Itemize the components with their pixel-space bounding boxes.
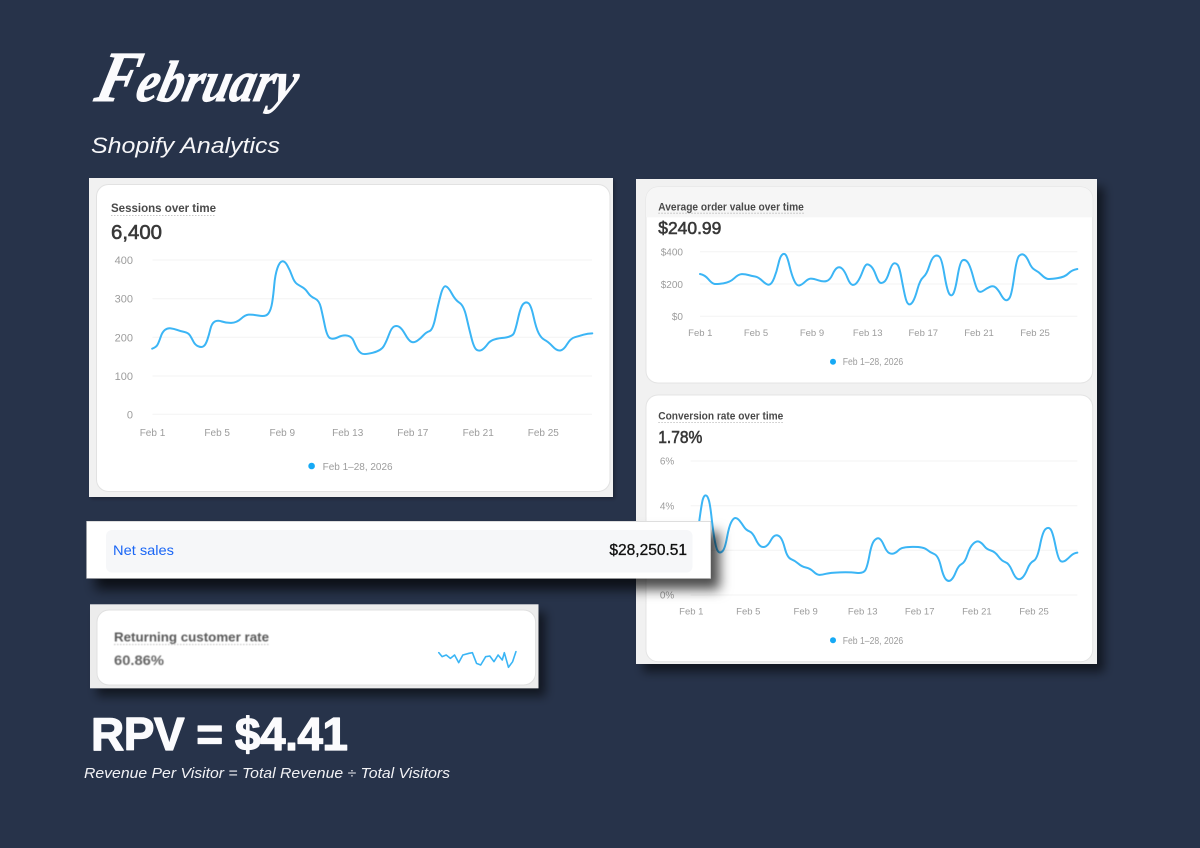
card: conversion rate [646, 395, 1093, 662]
panel: sessions over time [89, 178, 613, 497]
subtitle: Shopify Analytics [91, 133, 280, 158]
chart: sessions line: 100 [115, 371, 133, 383]
chart: returning customer sparkline [439, 652, 516, 667]
chart: average order value line: Feb 9 [800, 328, 824, 339]
chart: conversion rate line [660, 457, 1077, 618]
value: returning customer rate: 60.86% [114, 653, 164, 668]
chart: sessions line: Feb 17 [397, 428, 429, 439]
chart: average order value line: Feb 5 [744, 328, 768, 339]
chart: average order value line: Feb 13 [853, 328, 882, 339]
chart: average order value line: $0 [672, 312, 683, 323]
chart: sessions line: 300 [115, 294, 133, 306]
chart: sessions line: 200 [115, 332, 133, 344]
chart: conversion rate line: Feb 5 [736, 606, 760, 618]
panel: AOV and conversion charts [636, 179, 1097, 664]
heading: returning customer rate: Returning customer rate [114, 630, 269, 644]
chart: sessions line: 0 [127, 409, 133, 421]
chart: average order value line: Feb 17 [909, 328, 938, 339]
legend: conversion rate: Feb 1–28, 2026 [843, 636, 904, 647]
chart: average order value line: $200 [661, 280, 683, 291]
chart: conversion rate line: Feb 17 [905, 606, 934, 618]
heading: average order value: Average order value over time [658, 202, 804, 214]
value: net sales: $28,250.51 [609, 542, 687, 559]
chart: sessions line: Feb 9 [270, 428, 296, 439]
legend: average order value: Feb 1–28, 2026 [843, 357, 904, 368]
chart: sessions line: Feb 25 [528, 428, 559, 439]
text: RPV formula: Revenue Per Visitor = Total Revenue ÷ Total Visitors [84, 766, 450, 782]
chart: sessions line: Feb 21 [463, 428, 494, 439]
chart: average order value line: Feb 25 [1020, 328, 1050, 339]
chart: average order value line: Feb 21 [964, 328, 994, 339]
chart: conversion rate line: Feb 9 [794, 606, 818, 618]
chart: conversion rate line: Feb 13 [848, 606, 877, 618]
chart: sessions line: 400 [115, 255, 133, 267]
value: average order value: $240.99 [658, 218, 721, 238]
panel: returning customer rate [90, 604, 538, 688]
chart: average order value line [661, 248, 1077, 339]
heading: sessions: Sessions over time [111, 201, 216, 215]
chart: sessions line: Feb 1 [140, 428, 166, 439]
chart: conversion rate line: Feb 25 [1019, 606, 1049, 618]
card: average order value [646, 187, 1093, 383]
chart: sessions line [115, 255, 592, 439]
legend: sessions: Feb 1–28, 2026 [323, 461, 393, 473]
heading: conversion rate: Conversion rate over time [658, 411, 783, 423]
label: net sales: Net sales [113, 542, 174, 558]
value: sessions: 6,400 [111, 222, 162, 244]
chart: conversion rate line: 0% [660, 591, 674, 602]
chart: conversion rate line: 4% [660, 501, 674, 512]
chart: conversion rate line: 6% [660, 457, 674, 468]
chart: average order value line: Feb 1 [688, 328, 712, 339]
chart: conversion rate line: Feb 21 [962, 606, 992, 618]
chart: sessions line: Feb 13 [332, 428, 364, 439]
chart: average order value line: $400 [661, 248, 683, 258]
title: February [88, 37, 310, 117]
heading: RPV metric: RPV = $4.41 [91, 708, 348, 760]
panel: net sales [87, 521, 711, 578]
chart: conversion rate line: Feb 1 [679, 606, 703, 618]
value: conversion rate: 1.78% [658, 427, 702, 447]
chart: sessions line: Feb 5 [204, 428, 230, 439]
